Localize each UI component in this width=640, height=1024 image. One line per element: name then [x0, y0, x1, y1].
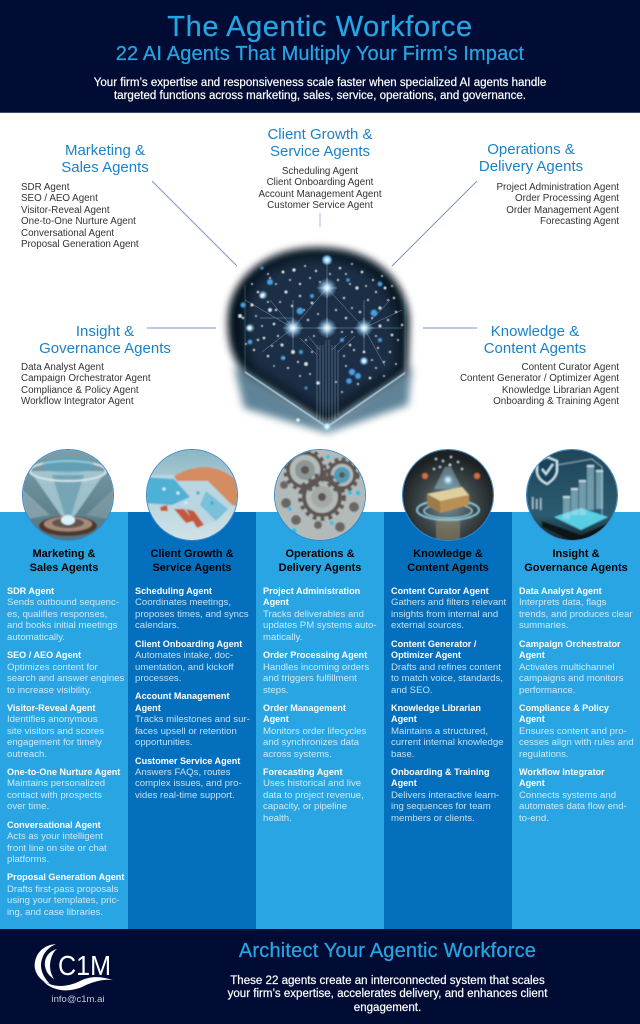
heading: insight: Governance Agents [39, 340, 171, 357]
agent: onboarding and training: members or clients. [391, 813, 475, 824]
agent: data analyst: Data Analyst Agent [519, 586, 602, 596]
agent: compliance: regulations. [519, 749, 569, 760]
header band [0, 0, 640, 113]
agent: knowledge librarian: base. [391, 749, 414, 760]
agent: onboarding: Client Onboarding Agent [135, 639, 242, 649]
agent: SDR: SDR Agent [7, 586, 54, 596]
central image: glowing AI brain [228, 248, 412, 433]
agent: nurture [7, 767, 120, 812]
agent list: operations: Order Processing Agent [515, 193, 619, 204]
agent list: knowledge: Onboarding & Training Agent [493, 396, 619, 407]
agent descriptions [7, 586, 124, 918]
agent: nurture: contact with prospects [7, 790, 102, 801]
agent: data analyst: summaries. [519, 620, 569, 631]
agent: onboarding [135, 639, 242, 684]
agent: order processing: steps. [263, 685, 289, 696]
agent: scheduling: proposes times, and syncs [135, 609, 249, 620]
column heading: Delivery Agents [279, 562, 361, 574]
column heading [279, 548, 361, 574]
panel: client growth list [258, 126, 382, 211]
connector: insight to brain [147, 327, 216, 329]
agent: proposal: ing, and case libraries. [7, 907, 103, 918]
column heading [407, 548, 489, 574]
agent: SDR: es, qualifies responses, [7, 609, 107, 620]
agent: forecasting: health. [263, 813, 292, 824]
heading: insight: Insight & [76, 323, 134, 340]
agent: order processing: and triggers fulfillment [263, 673, 357, 684]
agent: workflow integrator: to-end. [519, 813, 549, 824]
title: The Agentic Workforce [167, 11, 473, 43]
column heading: Service Agents [152, 562, 232, 574]
intro text: Your firm’s expertise and responsiveness scale faster when specialized AI agents handle [94, 77, 546, 89]
connector: marketing to brain [152, 181, 237, 266]
agent: conversational: platforms. [7, 854, 49, 865]
heading: knowledge [484, 323, 586, 357]
agent: account management: opportunities. [135, 737, 193, 748]
connector: operations to brain [392, 181, 477, 266]
agent: onboarding: umentation, and kickoff [135, 662, 234, 673]
agent: order processing [263, 650, 369, 696]
agent: SDR [7, 586, 119, 643]
agent: visitor reveal: outreach. [7, 749, 47, 760]
agent: nurture: One-to-One Nurture Agent [7, 767, 120, 777]
column heading [30, 548, 98, 574]
agent: onboarding and training: Delivers interactive learn- [391, 790, 499, 801]
column heading: Content Agents [407, 562, 489, 574]
agent: knowledge librarian: current internal knowledge [391, 737, 504, 748]
agent: onboarding: Automates intake, doc- [135, 650, 233, 661]
agent: project administration: Project Administration [263, 586, 360, 596]
panel: insight column [512, 512, 640, 929]
agent: knowledge librarian: Agent [391, 714, 417, 724]
agent: campaign orchestrator [519, 639, 640, 696]
agent: campaign orchestrator: Agent [519, 650, 545, 660]
panel: insight list [21, 323, 171, 407]
agent: conversational: Acts as your intelligent [7, 831, 103, 842]
agent: knowledge librarian: Maintains a structured, [391, 726, 488, 737]
agent: visitor reveal: site visitors and scores [7, 726, 104, 737]
agent list: operations: Project Administration Agent [496, 182, 619, 193]
heading: marketing [61, 142, 149, 176]
icon: handshake [146, 449, 238, 541]
agent: order management: Order Management [263, 703, 346, 713]
heading: knowledge: Content Agents [484, 340, 586, 357]
agent: onboarding and training: ing sequences for team [391, 801, 491, 812]
agent: content generator: Content Generator / [391, 639, 476, 649]
illustrations layer [22, 180, 618, 990]
agent: scheduling [135, 586, 249, 631]
agent: visitor reveal: Visitor-Reveal Agent [7, 703, 95, 713]
agent: content generator: Optimizer Agent [391, 650, 461, 660]
panel: operations column [256, 512, 384, 929]
agent: conversational [7, 820, 107, 865]
panel: knowledge list [460, 323, 619, 407]
agent: proposal [7, 872, 124, 918]
agent: workflow integrator [519, 767, 640, 824]
agent: content curator: Content Curator Agent [391, 586, 489, 596]
agent: forecasting: Forecasting Agent [263, 767, 342, 777]
agent list: marketing [21, 182, 139, 250]
agent: project administration: updates PM systems auto- [263, 620, 377, 631]
heading: knowledge: Knowledge & [491, 323, 579, 340]
heading: marketing: Marketing & [65, 142, 145, 159]
agent: SEO: SEO / AEO Agent [7, 650, 81, 660]
agent: compliance: Agent [519, 714, 545, 724]
agent: content curator: external sources. [391, 620, 464, 631]
icon: funnel [22, 449, 114, 541]
agent: account management: faces upsell or retention [135, 726, 237, 737]
agent list: insight [21, 362, 151, 407]
agent: customer service: complex issues, and pro- [135, 778, 242, 789]
heading: operations: Delivery Agents [479, 158, 583, 175]
agent: campaign orchestrator: Campaign Orchestrator [519, 639, 621, 649]
agent: project administration [263, 586, 377, 643]
footer text: your firm’s expertise, accelerates delivery, and enhances client [228, 988, 547, 1000]
agent: project administration: Tracks deliverables and [263, 609, 364, 620]
agent list: marketing: SDR Agent [21, 182, 69, 193]
agent list: marketing: One-to-One Nurture Agent [21, 216, 136, 227]
panel: marketing list [21, 142, 149, 250]
agent: account management: Tracks milestones and sur- [135, 714, 250, 725]
agent descriptions [519, 586, 640, 831]
connector: knowledge to brain [423, 327, 477, 329]
agent: forecasting: data to project revenue, [263, 790, 364, 801]
agent: SEO [7, 650, 124, 696]
agent: SEO: Optimizes content for [7, 662, 98, 673]
agent: compliance: Ensures content and pro- [519, 726, 627, 737]
logo: C1M: C1M [58, 950, 111, 981]
agent: workflow integrator: Agent [519, 778, 545, 788]
bright star nodes [245, 254, 374, 432]
agent list: client growth: Customer Service Agent [267, 200, 373, 211]
agent: data analyst [519, 586, 640, 632]
agent list: marketing: Conversational Agent [21, 228, 114, 239]
agent list: marketing: SEO / AEO Agent [21, 193, 98, 204]
agent: account management: Account Management [135, 691, 230, 701]
panel: marketing column [0, 512, 128, 929]
column heading: Knowledge & [413, 548, 483, 560]
agent: SDR: and books initial meetings [7, 620, 117, 631]
agent: content curator: Gathers and filters relevant [391, 597, 506, 608]
agent: data analyst: trends, and produces clear [519, 609, 633, 620]
agent: order management: Agent [263, 714, 289, 724]
agent: account management [135, 691, 250, 748]
icon: analytics and shield [526, 449, 618, 541]
contact email: info@c1m.ai [52, 994, 104, 1005]
agent: data analyst: Interprets data, flags [519, 597, 606, 608]
agent: order management: across systems. [263, 749, 332, 760]
agent: visitor reveal: engagement for timely [7, 737, 102, 748]
agent: onboarding: processes. [135, 673, 181, 684]
agent: onboarding and training: Agent [391, 778, 417, 788]
agent list: insight: Compliance & Policy Agent [21, 385, 139, 396]
agent: compliance [519, 703, 640, 760]
agent: content curator: insights from internal and [391, 609, 498, 620]
heading: operations: Operations & [487, 141, 575, 158]
column heading: Operations & [285, 548, 355, 560]
subtitle: 22 AI Agents That Multiply Your Firm’s Impact [116, 43, 524, 65]
agent: content curator [391, 586, 506, 631]
agent: conversational: front line on site or chat [7, 843, 107, 854]
heading: operations [479, 141, 583, 175]
agent list: operations: Order Management Agent [506, 205, 619, 216]
agent: order management: and synchronizes data [263, 737, 359, 748]
agent list: client growth: Account Management Agent [258, 189, 382, 200]
agent: campaign orchestrator: performance. [519, 685, 576, 696]
agent list: marketing: Visitor-Reveal Agent [21, 205, 110, 216]
icon: knowledge block [402, 449, 494, 541]
agent list: knowledge: Knowledge Librarian Agent [502, 385, 619, 396]
agent list: operations: Forecasting Agent [540, 216, 619, 227]
agent: proposal: using your templates, pric- [7, 895, 120, 906]
agent list: knowledge: Content Generator / Optimizer Agent [460, 373, 619, 384]
agent: knowledge librarian [391, 703, 512, 760]
panel: operations list [479, 141, 619, 227]
icon: gears [274, 449, 366, 541]
agent list: client growth: Client Onboarding Agent [267, 177, 373, 188]
agent: proposal: Proposal Generation Agent [7, 872, 124, 882]
agent: proposal: Drafts first-pass proposals [7, 884, 118, 895]
agent: compliance: Compliance & Policy [519, 703, 609, 713]
agent: onboarding and training: Onboarding & Training [391, 767, 490, 777]
agent: nurture: Maintains personalized [7, 778, 105, 789]
agent: workflow integrator: Workflow Integrator [519, 767, 605, 777]
agent: onboarding and training [391, 767, 512, 824]
agent: account management: Agent [135, 703, 161, 713]
agent: SEO: to increase visibility. [7, 685, 92, 696]
agent: workflow integrator: Connects systems and [519, 790, 616, 801]
agent: knowledge librarian: Knowledge Librarian [391, 703, 481, 713]
agent: forecasting: Uses historical and live [263, 778, 361, 789]
agent: customer service: Answers FAQs, routes [135, 767, 230, 778]
connector: client growth to brain [319, 213, 321, 227]
column heading: Governance Agents [524, 562, 628, 574]
agent descriptions [135, 586, 250, 801]
agent list: operations [496, 182, 619, 227]
agent: order management: Monitors order lifecycles [263, 726, 366, 737]
agent: visitor reveal: Identifies anonymous [7, 714, 98, 725]
footer heading: Architect Your Agentic Workforce [239, 940, 536, 962]
agent: SEO: search and answer engines [7, 673, 124, 684]
agent list: marketing: Proposal Generation Agent [21, 239, 139, 250]
agent: campaign orchestrator: Activates multichannel [519, 662, 614, 673]
panel: client growth column [128, 512, 256, 929]
agent list: insight: Data Analyst Agent [21, 362, 104, 373]
agent: nurture: over time. [7, 801, 49, 812]
column heading [150, 548, 234, 574]
footer text [68, 975, 640, 1015]
agent descriptions [263, 586, 377, 824]
intro text [94, 76, 546, 102]
agent: compliance: cesses align with rules and [519, 737, 634, 748]
column heading [512, 548, 640, 575]
footer text: engagement. [354, 1002, 421, 1014]
agent: content generator: to match voice, standards, [391, 673, 503, 684]
column heading: Marketing & [33, 548, 95, 560]
agent: SDR: automatically. [7, 632, 65, 643]
heading: client growth [267, 126, 373, 160]
agent: conversational: Conversational Agent [7, 820, 101, 830]
column heading: Sales Agents [30, 562, 98, 574]
footer text: These 22 agents create an interconnected system that scales [230, 975, 545, 987]
agent: order management [263, 703, 366, 760]
agent: forecasting: capacity, or pipeline [263, 801, 347, 812]
column heading: Client Growth & [150, 548, 234, 560]
agent: project administration: Agent [263, 597, 289, 607]
agent list: client growth: Scheduling Agent [282, 166, 358, 177]
agent list: client growth [258, 166, 382, 211]
agent: visitor reveal [7, 703, 104, 760]
agent: scheduling: Scheduling Agent [135, 586, 212, 596]
agent: forecasting [263, 767, 364, 824]
agent: customer service [135, 756, 242, 801]
agent: content generator: Drafts and refines content [391, 662, 501, 673]
agent: scheduling: calendars. [135, 620, 179, 631]
agent: content generator: and SEO. [391, 685, 433, 696]
agent: project administration: matically. [263, 632, 302, 643]
agent list: insight: Campaign Orchestrator Agent [21, 373, 151, 384]
intro text: targeted functions across marketing, sales, service, operations, and governance. [114, 90, 526, 102]
agent: customer service: Customer Service Agent [135, 756, 240, 766]
agent list: insight: Workflow Integrator Agent [21, 396, 134, 407]
agent list: knowledge: Content Curator Agent [522, 362, 619, 373]
agent: workflow integrator: automates data flow end- [519, 801, 627, 812]
footer band [0, 929, 640, 1024]
agent: content generator [391, 639, 503, 696]
column heading: Insight & [552, 548, 600, 560]
agent list: knowledge [460, 362, 619, 407]
agent: SDR: Sends outbound sequenc- [7, 597, 119, 608]
heading: marketing: Sales Agents [61, 159, 149, 176]
agent: scheduling: Coordinates meetings, [135, 597, 231, 608]
heading: client growth: Service Agents [270, 143, 370, 160]
heading: client growth: Client Growth & [267, 126, 373, 143]
panel: knowledge column [384, 512, 512, 929]
agent: order processing: Order Processing Agent [263, 650, 367, 660]
agent: customer service: vides real-time support. [135, 790, 235, 801]
heading: insight [39, 323, 171, 357]
logo: C1M [35, 944, 113, 990]
agent descriptions [391, 586, 506, 824]
agent: campaign orchestrator: campaigns and monitors [519, 673, 624, 684]
agent: order processing: Handles incoming orders [263, 662, 369, 673]
